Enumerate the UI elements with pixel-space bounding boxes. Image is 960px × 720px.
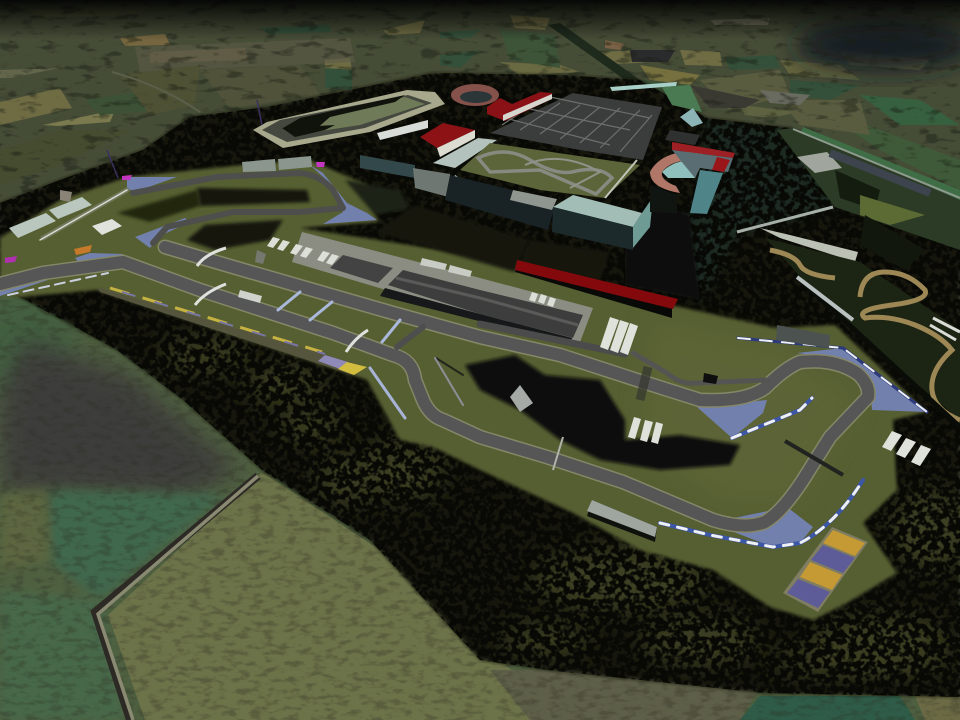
striped bleachers xyxy=(783,527,868,612)
red buildings upper xyxy=(420,84,552,168)
white marquees row by paddock xyxy=(267,237,556,307)
farmland at top xyxy=(0,0,960,215)
grass infield xyxy=(0,160,927,620)
main complex buildings xyxy=(360,142,735,250)
car park xyxy=(490,82,703,160)
right side motocross area xyxy=(737,127,960,427)
footbridges over track xyxy=(195,248,843,475)
dark grandstand near far curve xyxy=(776,325,830,348)
main circuit track xyxy=(0,173,927,547)
concrete paddock xyxy=(292,232,593,342)
upper oval track xyxy=(253,90,445,148)
white tents xyxy=(600,317,931,466)
pit building xyxy=(330,255,583,344)
buses and small vehicles xyxy=(238,250,266,303)
fields lower left and bottom xyxy=(0,280,960,720)
kart track xyxy=(460,143,640,198)
grandstands upper left xyxy=(9,156,312,238)
yellow and purple grandstand strip xyxy=(97,287,367,375)
barn in infield xyxy=(510,385,533,412)
blue run-off areas xyxy=(0,165,927,547)
grandstand on lower straight xyxy=(587,500,657,542)
magenta and orange markers xyxy=(5,100,325,263)
forest patches in infield xyxy=(117,180,740,470)
long red building xyxy=(515,260,678,318)
small black hut xyxy=(703,373,718,384)
